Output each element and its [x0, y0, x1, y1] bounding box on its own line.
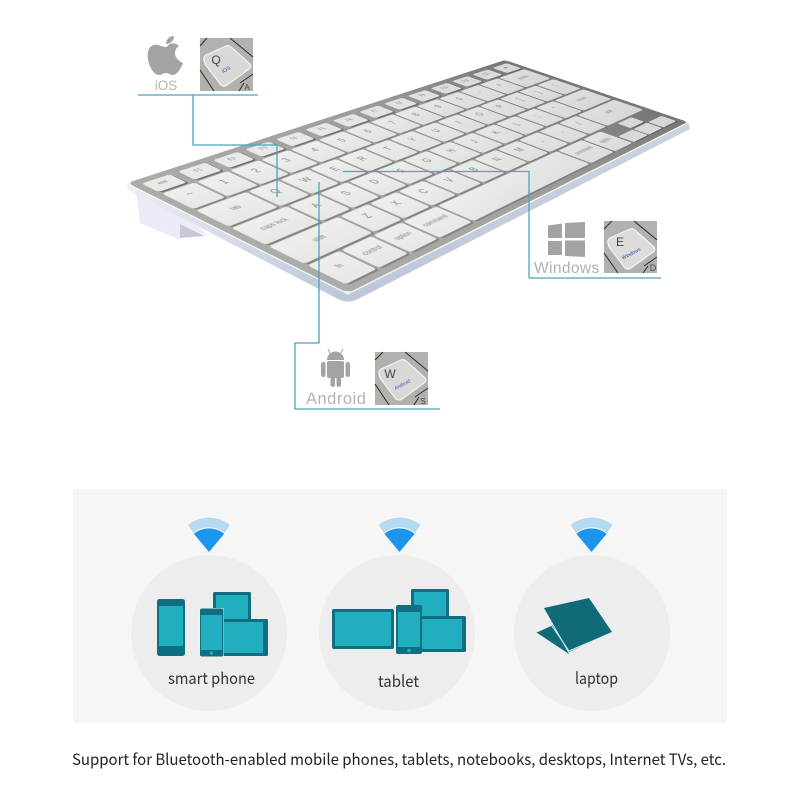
- QWERTY key row: E: [326, 165, 343, 172]
- shift key row: Z: [358, 212, 376, 220]
- QWERTY key row: [197, 79, 580, 227]
- icon: wireless signal: [570, 518, 612, 552]
- icon: apple logo: [148, 36, 183, 75]
- shift key row: C: [415, 188, 432, 195]
- function key row: F9: [417, 93, 427, 97]
- home key row: H: [443, 147, 459, 154]
- QWERTY key row: O: [472, 111, 487, 117]
- illustration: keyboard underside and foot: [127, 122, 690, 302]
- icon: landscape tablet: [332, 609, 394, 649]
- number key row: 1: [216, 178, 232, 185]
- arrow keys: [618, 116, 678, 142]
- key photo: W key: Android: [394, 378, 412, 392]
- icon: laptop: [536, 598, 612, 655]
- number key row: 4: [307, 147, 323, 153]
- QWERTY key row: Q: [266, 187, 285, 195]
- label: tablet: tablet: [378, 668, 419, 692]
- caption: Support for Bluetooth-enabled mobile phones, tablets, notebooks, desktops, Internet TVs, etc.: [72, 748, 726, 770]
- number key row: -: [474, 90, 486, 94]
- shift key row: shift: [603, 109, 616, 114]
- space key row: option: [392, 231, 415, 241]
- function key row: F6: [343, 118, 355, 122]
- shift key row: ,: [534, 138, 547, 143]
- shift key row: X: [387, 199, 405, 207]
- key photo: E key: E: [616, 235, 624, 249]
- number key row: 8: [409, 112, 423, 117]
- space key row: option: [597, 137, 614, 144]
- function key row: F2: [225, 156, 238, 161]
- key photo: W key: [375, 352, 428, 406]
- key photo: Q key: Q: [211, 53, 221, 67]
- QWERTY key row: T: [380, 146, 396, 152]
- home key row: G: [418, 157, 435, 164]
- home key row: ': [550, 106, 562, 110]
- number key row: 0: [453, 97, 466, 101]
- QWERTY key row: tab: [228, 204, 244, 211]
- function key row: F3: [257, 146, 270, 151]
- function key row: F4: [288, 136, 299, 140]
- space key row: command: [420, 214, 451, 228]
- icon: android robot: [321, 349, 350, 387]
- icon: wireless signal: [188, 518, 230, 552]
- shift key row: .: [554, 129, 567, 134]
- label: Windows: Windows: [534, 260, 600, 277]
- number key row: ~: [182, 190, 199, 198]
- number key row: =: [493, 83, 506, 87]
- QWERTY key row: R: [354, 155, 371, 162]
- label: Android: Android: [306, 390, 366, 408]
- keyboard edge highlight: [128, 122, 688, 294]
- key photo: Q key: [200, 38, 253, 92]
- label: iOS: iOS: [155, 78, 177, 93]
- space key row: control: [360, 244, 386, 257]
- QWERTY key row: P: [493, 104, 507, 109]
- home key row: caps lock: [257, 217, 291, 231]
- home key row: J: [467, 139, 481, 144]
- key photo: W key: W: [384, 367, 396, 381]
- number key row: 2: [248, 167, 264, 174]
- home key row: S: [337, 189, 355, 197]
- space key row: command: [572, 145, 596, 156]
- panel: supported devices: [73, 489, 727, 723]
- device group: smart phone: [131, 518, 287, 711]
- QWERTY key row: I: [452, 120, 465, 125]
- icon: tablets and phone: [396, 589, 466, 654]
- icon: tablets and phone: [199, 592, 268, 657]
- function key row: esc: [155, 179, 170, 185]
- device group: tablet: [319, 518, 475, 711]
- shift key row: N: [489, 156, 505, 163]
- icon: phone: [157, 599, 185, 656]
- key photo: W key: S: [420, 397, 426, 406]
- key photo: Q key: A: [244, 83, 250, 92]
- QWERTY key row: U: [428, 128, 444, 134]
- number key row: 3: [278, 157, 294, 163]
- QWERTY key row: Y: [405, 136, 420, 143]
- function key row: F12: [480, 72, 491, 76]
- home key row: D: [366, 178, 383, 185]
- shift key row: V: [441, 177, 458, 184]
- key photo: E key: [604, 221, 657, 273]
- function key row: F7: [369, 109, 380, 113]
- home key row: K: [488, 130, 504, 135]
- number key row: 9: [431, 104, 445, 109]
- function key row: F11: [460, 79, 471, 83]
- home key row: [232, 90, 611, 245]
- connector line: Windows: [343, 172, 661, 278]
- shift key row: [270, 100, 643, 264]
- keyboard lip: [127, 122, 690, 302]
- home key row: return: [574, 96, 589, 102]
- device group: laptop: [514, 518, 670, 711]
- function key row: F8: [394, 101, 404, 105]
- function key row: [142, 64, 522, 192]
- home key row: ;: [531, 114, 543, 118]
- number key row: [163, 70, 550, 210]
- function key row: F5: [316, 127, 328, 131]
- shift key row: M: [511, 146, 527, 153]
- space key row: [308, 132, 632, 284]
- foot notch: [180, 224, 205, 238]
- key photo: E key: Windows: [621, 246, 642, 262]
- far end shading: [127, 60, 688, 293]
- keyboard: [127, 60, 688, 293]
- QWERTY key row: W: [296, 176, 316, 184]
- function key row: ⏏: [501, 66, 509, 69]
- icon: wireless signal: [378, 518, 420, 552]
- label: smart phone: smart phone: [168, 665, 255, 689]
- function key row: F1: [192, 167, 205, 173]
- key photo: Q key: iOS: [221, 65, 232, 75]
- QWERTY key row: [: [513, 97, 525, 101]
- shift key row: B: [466, 166, 482, 173]
- space key row: fn: [333, 263, 347, 269]
- home key row: A: [307, 201, 325, 209]
- home key row: L: [510, 121, 524, 127]
- QWERTY key row: \: [550, 84, 561, 88]
- number key row: 6: [361, 128, 375, 134]
- shift key row: shift: [310, 234, 330, 243]
- icon: windows logo: [548, 222, 585, 257]
- key photo: E key: D: [650, 263, 657, 273]
- foot: [130, 186, 208, 240]
- shift key row: /: [573, 121, 585, 126]
- label: laptop: laptop: [575, 665, 618, 689]
- number key row: 5: [335, 137, 350, 143]
- number key row: 7: [385, 120, 400, 125]
- QWERTY key row: ]: [532, 90, 544, 94]
- connector line: iOS: [138, 95, 277, 197]
- home key row: F: [393, 167, 410, 174]
- function key row: F10: [439, 86, 450, 90]
- number key row: delete: [516, 75, 531, 80]
- connector line: Android: [295, 182, 440, 409]
